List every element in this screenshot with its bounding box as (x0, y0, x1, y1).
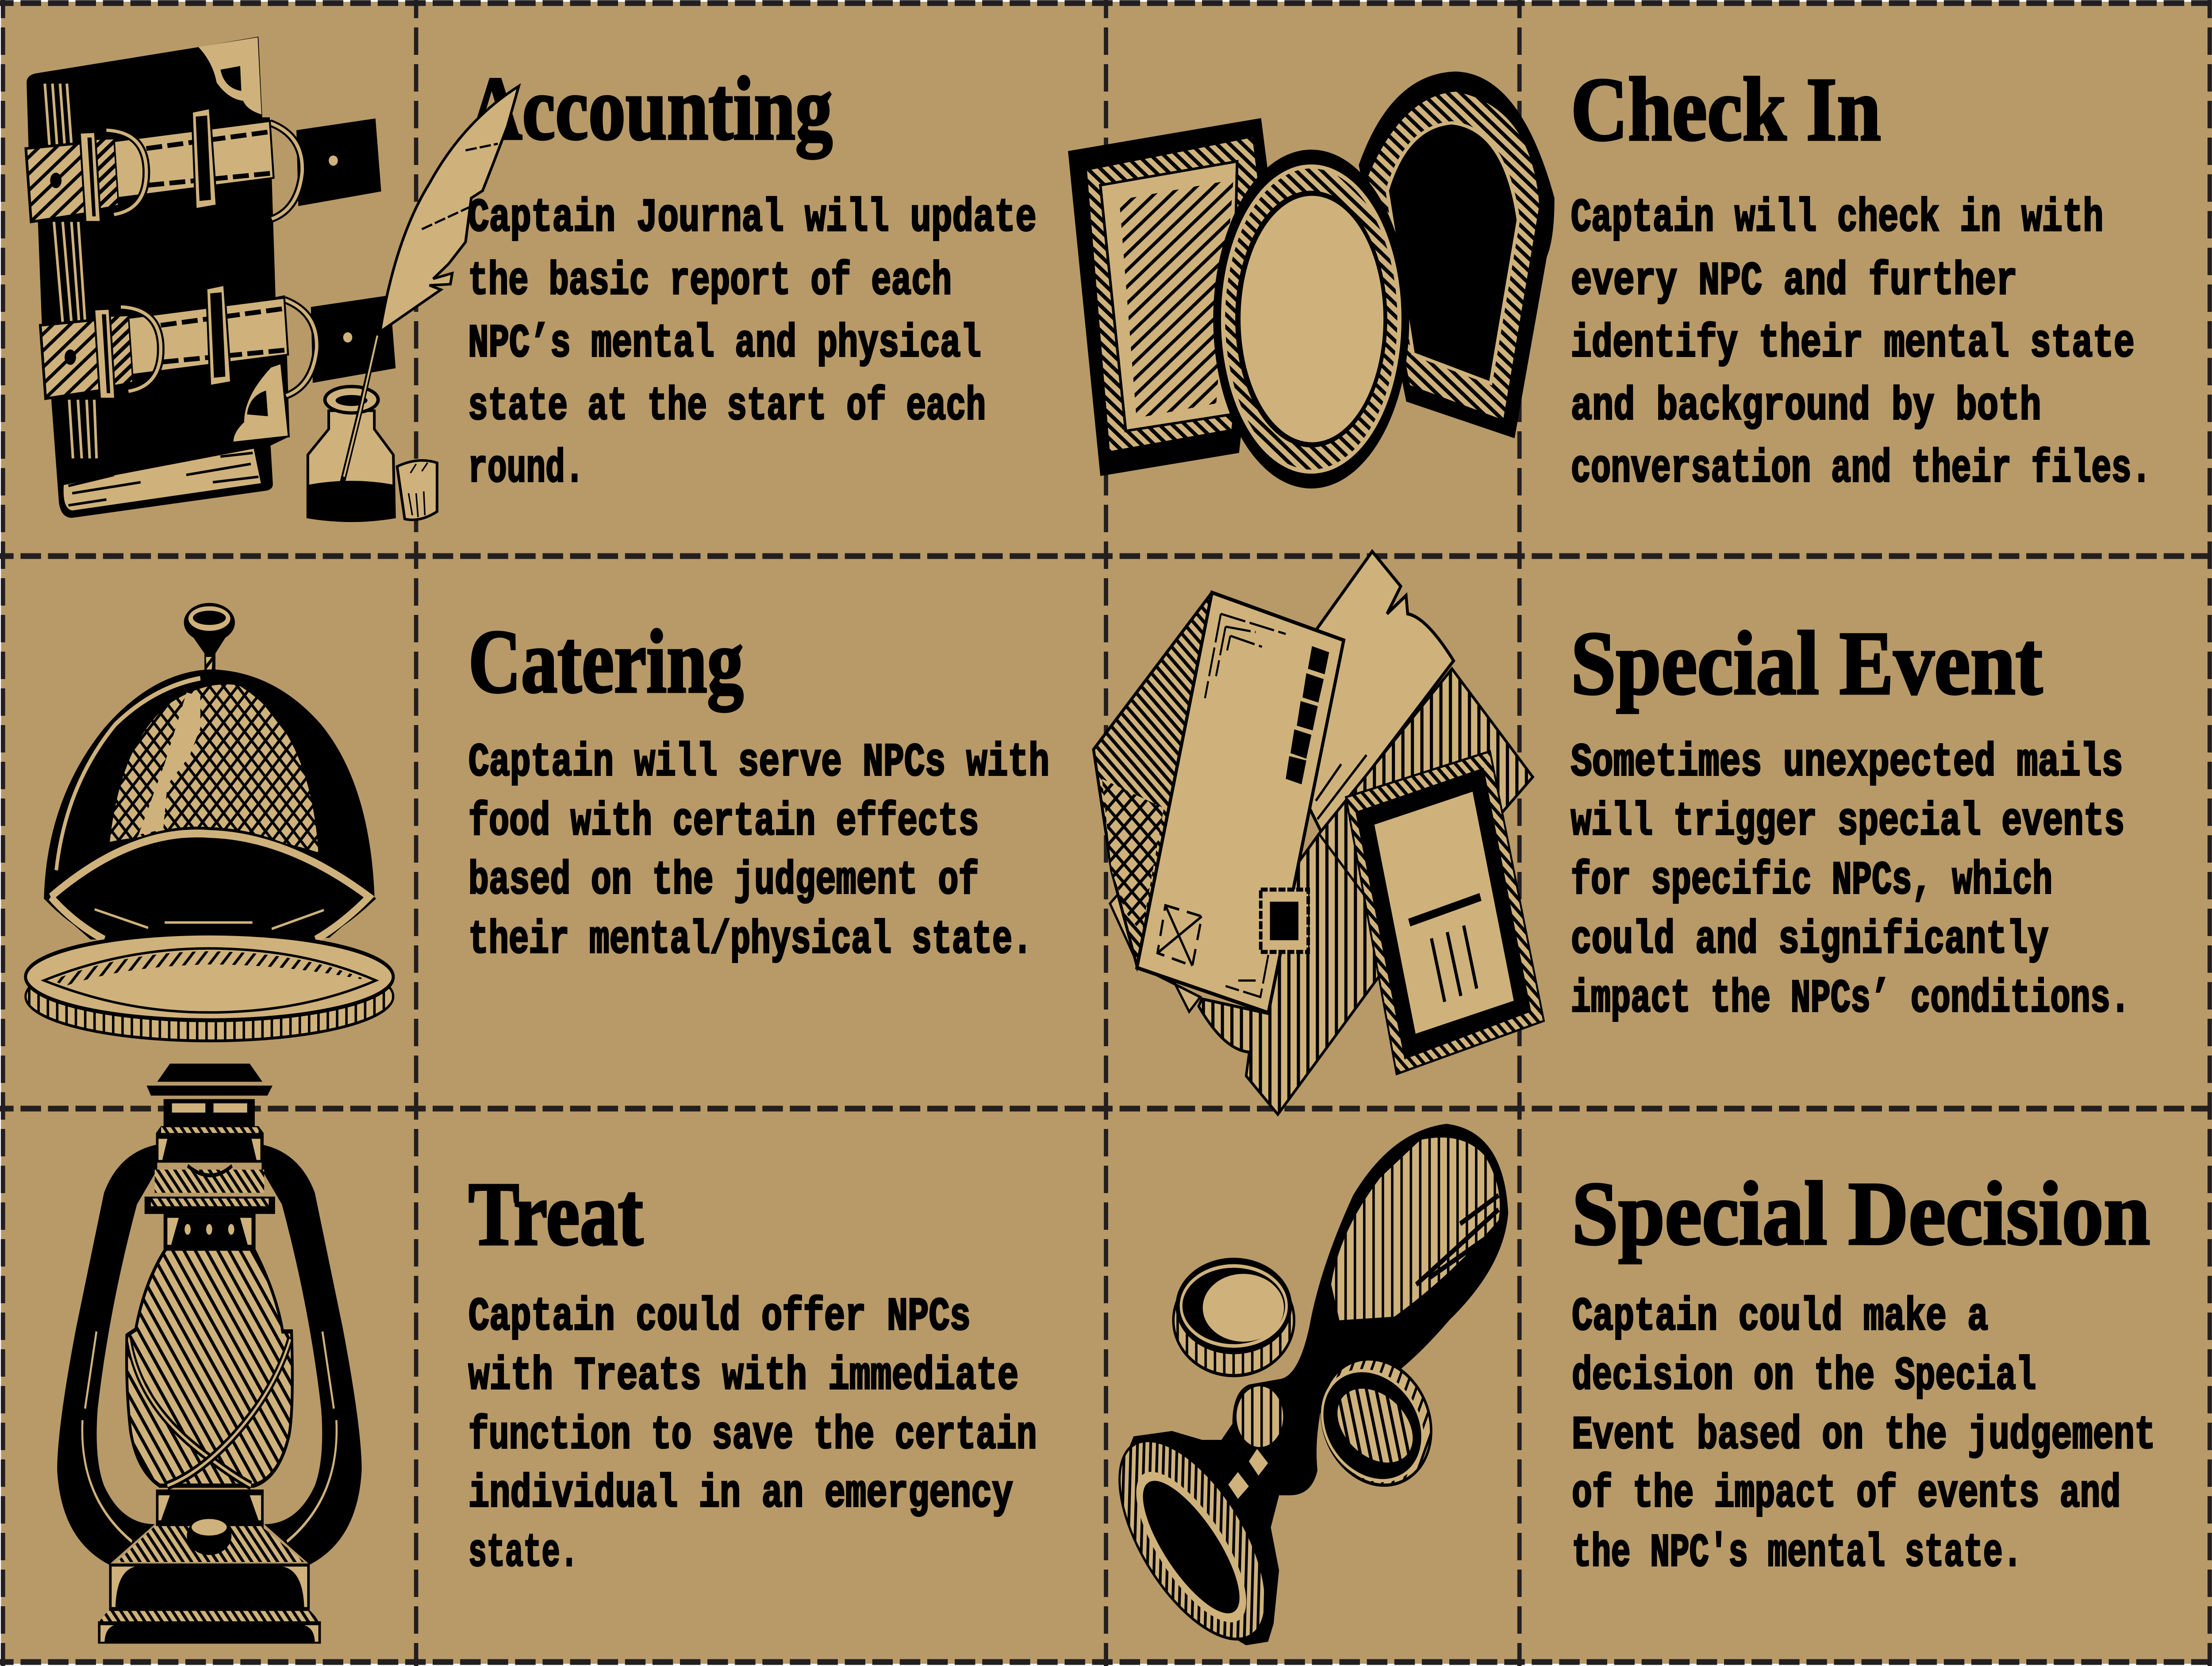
body: Special Decision (1572, 1291, 2155, 1580)
body: Catering: Captain will serve NPCs with (469, 737, 1049, 789)
vent windows (172, 1103, 247, 1113)
right coin face (1329, 1374, 1422, 1477)
text block: Check In (1571, 60, 2151, 495)
handle shadow cross lines (1416, 1195, 1502, 1285)
quill stem (342, 332, 378, 484)
burner block (164, 1214, 256, 1249)
band arc (188, 1166, 232, 1175)
cork lines (408, 463, 427, 517)
postcard panel (1375, 792, 1514, 1034)
glass globe (127, 1249, 292, 1486)
oval frame outer (1213, 150, 1409, 488)
postage stamp centre (1270, 902, 1298, 940)
page block (62, 447, 262, 511)
body: Special Event: for specific NPCs, which (1571, 855, 2052, 907)
collar squares (1204, 1449, 1268, 1517)
stamp body (1120, 1124, 1508, 1645)
postcard black border (1356, 768, 1531, 1059)
rim (46, 829, 373, 940)
base hatch (99, 1611, 321, 1623)
collar (156, 1126, 264, 1163)
icon: strapped journal with quill and ink (26, 37, 519, 521)
plate well hatching (52, 951, 368, 986)
body: Accounting: the basic report of each (468, 255, 952, 308)
guard wire B highlight (167, 1339, 290, 1486)
heading: Check In: Check In (1571, 60, 1881, 160)
journal cover (27, 37, 290, 518)
redraw lower corner guard over strap tail (233, 363, 289, 443)
handle stripes (1331, 1137, 1500, 1320)
lower corner hole (247, 391, 268, 416)
lantern handle left (57, 1144, 157, 1565)
body: Accounting: NPC’s mental and physical (468, 318, 981, 370)
base light ring (1119, 1450, 1263, 1644)
stem highlight (206, 657, 213, 676)
heading: Special Decision: Special Decision (1572, 1164, 2150, 1264)
left hatched envelope (1094, 592, 1212, 966)
bottle opening (336, 395, 368, 406)
body: Accounting: round. (468, 443, 584, 495)
tank highlights (111, 1566, 307, 1607)
corner guards (198, 38, 289, 443)
lower collar (156, 1489, 264, 1528)
plate top (26, 933, 393, 1020)
text block: Accounting (468, 59, 1037, 495)
torn paper (1310, 552, 1454, 834)
guard wire A (129, 1339, 251, 1486)
body: Special Decision: of the impact of events and (1572, 1468, 2120, 1520)
icon: envelopes and letters (1094, 552, 1544, 1114)
plate edge (26, 952, 393, 1041)
body: Catering (469, 737, 1049, 967)
right coin edge (1306, 1336, 1447, 1508)
right striped envelope (1198, 669, 1533, 1114)
right frame rope band (1368, 92, 1539, 420)
icon: wax seal stamp (1094, 1124, 1508, 1666)
upper coin edge (1173, 1265, 1294, 1376)
heading: Catering: Catering (469, 612, 744, 712)
knob top (188, 606, 231, 631)
dome edge highlight (56, 678, 200, 870)
body: Special Event (1571, 737, 2130, 1025)
page lines (69, 453, 258, 505)
body: Catering: food with certain effects (469, 796, 979, 848)
postage stamp (1261, 890, 1308, 952)
text block: Special Decision (1572, 1164, 2155, 1580)
hatched band (155, 1170, 264, 1193)
left frame hatching (1119, 180, 1233, 418)
ink (308, 481, 395, 521)
base (98, 1621, 321, 1644)
body: Treat (469, 1291, 1037, 1580)
base highlights (100, 1625, 319, 1642)
base black face (1129, 1463, 1254, 1631)
rim inner lines (95, 910, 324, 929)
cork (397, 461, 437, 520)
filler cap (187, 1516, 231, 1555)
address box (1157, 906, 1202, 966)
left cross-hatching (1102, 779, 1164, 933)
oval frame rope edge (1235, 191, 1387, 447)
postcard lines (1432, 925, 1477, 1002)
body: Special Event: impact the NPCs’ conditions. (1571, 973, 2130, 1025)
body: Check In: every NPC and further (1571, 255, 2017, 308)
body: Check In: Captain will check in with (1571, 192, 2104, 245)
body: Treat: individual in an emergency (469, 1468, 1013, 1520)
body: Check In: conversation and their files. (1571, 443, 2151, 495)
body: Catering: their mental/physical state. (469, 914, 1033, 967)
body: Treat: Captain could offer NPCs (469, 1291, 971, 1344)
ink bottle (308, 411, 395, 521)
upper coin ring (1181, 1266, 1286, 1346)
envelope corner lines (1205, 614, 1286, 997)
right frame opening (1387, 123, 1518, 383)
lantern handle right (261, 1144, 362, 1565)
corner holes (220, 66, 268, 416)
stamps row (1286, 646, 1329, 784)
left under flap (1110, 889, 1200, 1012)
flared band (145, 1197, 275, 1214)
body: Accounting: state at the start of each (468, 380, 986, 433)
body: Special Decision: Event based on the judgement (1572, 1409, 2155, 1462)
tank hatch (117, 1526, 304, 1562)
left frame rope band (1087, 138, 1258, 451)
right coin top (1308, 1350, 1436, 1501)
body: Accounting: Captain Journal will update (468, 192, 1037, 245)
body: Catering: based on the judgement of (469, 855, 979, 907)
lower strap (40, 285, 396, 399)
icon: oil lantern (57, 1063, 362, 1644)
oval frame rope (1223, 166, 1399, 472)
lower collar highlights (158, 1495, 261, 1520)
vent neck (164, 1099, 255, 1128)
collar hatch (161, 1127, 258, 1133)
envelope fold lines (1316, 755, 1376, 911)
guard wire B (167, 1339, 290, 1486)
journal spine stripes (45, 84, 96, 458)
body: Accounting (468, 192, 1037, 495)
upper strap (26, 108, 381, 222)
body: Check In (1571, 192, 2151, 495)
quill marks (422, 144, 498, 229)
body: Treat: state. (469, 1527, 578, 1580)
text block: Special Event (1571, 614, 2130, 1025)
flared band hatch (151, 1198, 269, 1206)
body: Treat: function to save the certain (469, 1409, 1037, 1462)
knob (184, 603, 235, 642)
body: Special Decision: Captain could make a (1572, 1291, 1988, 1344)
collar highlights (158, 1139, 261, 1160)
body: Special Event: could and significantly (1571, 914, 2048, 967)
postcard rule (1409, 897, 1481, 923)
knob hole (193, 611, 226, 625)
rim highlight (51, 833, 369, 940)
body: Special Decision: decision on the Special (1572, 1350, 2036, 1403)
heading: Accounting: Accounting (469, 59, 833, 159)
postcard rope border (1346, 751, 1544, 1074)
plate well (44, 948, 376, 1013)
body: Check In: and background by both (1571, 380, 2041, 433)
body: Special Event: Sometimes unexpected mails (1571, 737, 2123, 789)
quill stem highlight (344, 336, 377, 477)
cloche stem (191, 634, 228, 673)
quill feather (380, 86, 519, 332)
filler cap top (191, 1518, 227, 1536)
body: Check In: identify their mental state (1571, 318, 2135, 370)
text block: Treat (469, 1164, 1037, 1580)
guard wire A highlight (129, 1339, 251, 1486)
burner holes (184, 1224, 234, 1235)
text block: Catering (469, 612, 1049, 967)
top cap (146, 1063, 273, 1096)
heading: Special Event: Special Event (1571, 614, 2043, 714)
icon: cloche and plate (26, 603, 393, 1041)
body: Treat: with Treats with immediate (469, 1350, 1018, 1403)
icon: picture frames (1068, 72, 1555, 488)
base rope rim (1094, 1409, 1291, 1666)
tank block (109, 1563, 310, 1612)
right frame outer (1359, 72, 1555, 438)
handle highlights (82, 1332, 337, 1542)
body: Special Decision: the NPC's mental state. (1572, 1527, 2022, 1580)
heading: Treat: Treat (469, 1164, 643, 1264)
left frame mat (1100, 161, 1237, 431)
upper coin face (1203, 1274, 1284, 1342)
left frame outer (1068, 118, 1269, 476)
burner highlights (167, 1218, 251, 1245)
body: Special Event: will trigger special events (1571, 796, 2124, 848)
bottle mouth (325, 387, 378, 413)
dome highlight (138, 692, 200, 835)
collar stripes (1237, 1386, 1283, 1447)
dome cross hatching (110, 684, 319, 852)
oval frame centre (1240, 196, 1383, 442)
main envelope (1137, 592, 1344, 1013)
dome (44, 669, 375, 940)
upper coin top (1175, 1258, 1292, 1354)
